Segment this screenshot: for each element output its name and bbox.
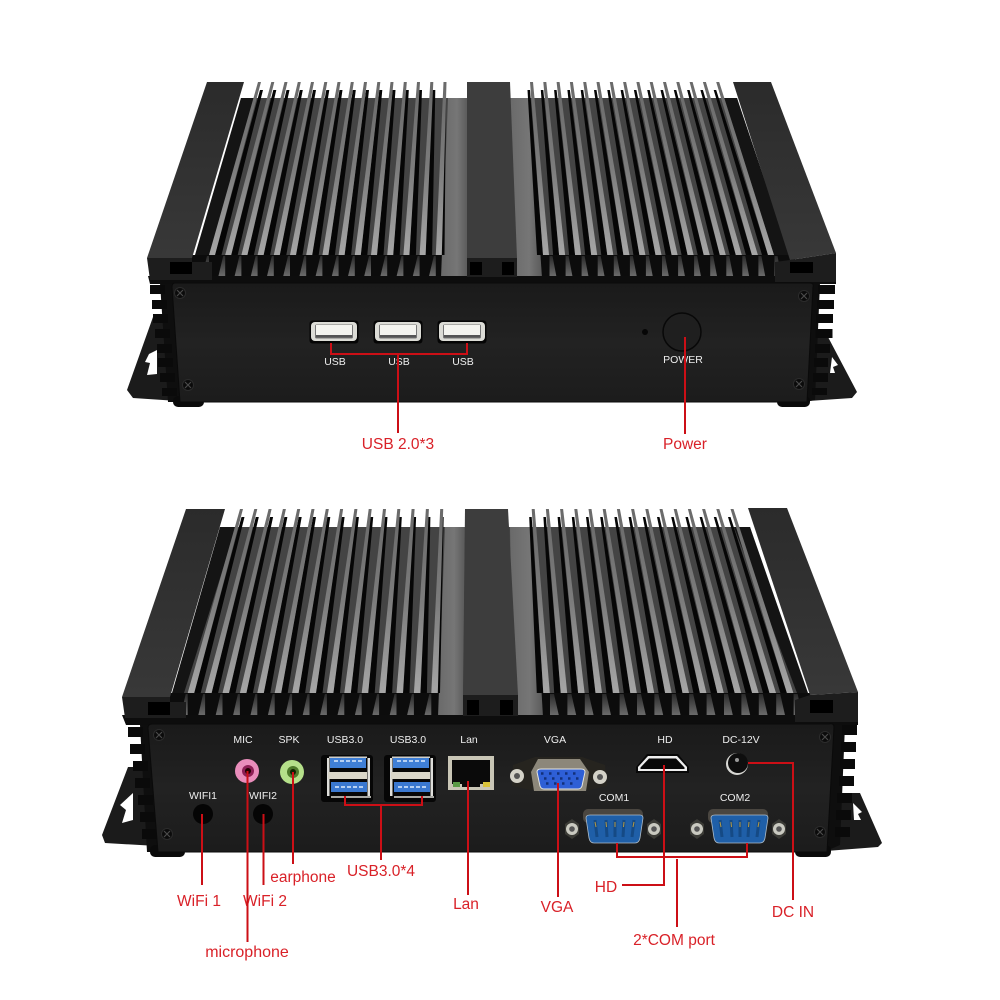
right rail xyxy=(748,508,858,722)
COM callout line xyxy=(617,843,747,927)
USB 3.0 ports xyxy=(321,755,436,802)
bottom unit: mini PC rear view xyxy=(102,508,882,857)
power LED xyxy=(642,329,648,335)
USB panel labels: USB xyxy=(324,356,346,368)
panel port labels: SPK xyxy=(278,734,300,746)
DC IN callout line xyxy=(748,763,793,900)
right fins shadows xyxy=(529,517,787,693)
centre grey channels xyxy=(438,527,543,717)
icon: speaker jack xyxy=(280,760,304,784)
USB panel labels: USB xyxy=(452,356,474,368)
USB panel labels: USB xyxy=(388,356,410,368)
WiFi 2 label: WiFi 2 xyxy=(243,893,287,910)
centre grey channels xyxy=(441,98,542,278)
heatsink base plate xyxy=(175,527,808,716)
Power label: Power xyxy=(663,436,707,453)
panel port labels: COM2 xyxy=(720,792,750,804)
panel port labels: VGA xyxy=(544,734,566,746)
shadows beside outer rails xyxy=(172,527,808,693)
WiFi 1 callout line xyxy=(201,814,203,885)
USB3.0*4 label: USB3.0*4 xyxy=(347,863,415,880)
fin front faces xyxy=(190,255,795,278)
USB 2.0 ports xyxy=(310,320,486,344)
power button xyxy=(663,313,701,351)
panel port labels: COM1 xyxy=(599,792,629,804)
right fin front wedges xyxy=(550,256,782,277)
left fins shadows xyxy=(215,90,446,255)
right fin front wedges xyxy=(550,694,803,716)
right fins shadows xyxy=(528,90,768,255)
panel port labels: HD xyxy=(657,734,673,746)
top unit: mini PC front view xyxy=(127,82,857,407)
front panel xyxy=(172,283,813,402)
right mounting bracket xyxy=(824,725,882,852)
left mounting bracket xyxy=(102,725,158,852)
right rail xyxy=(733,82,836,282)
HDMI port xyxy=(636,754,689,773)
right mounting bracket xyxy=(805,283,857,402)
panel port labels: DC-12V xyxy=(722,734,760,746)
HD label: HD xyxy=(595,879,617,896)
VGA port xyxy=(510,757,607,791)
feet xyxy=(173,396,810,407)
icon: microphone jack xyxy=(235,759,259,783)
COM ports xyxy=(565,809,786,843)
microphone label: microphone xyxy=(205,944,289,961)
VGA callout line xyxy=(557,783,559,897)
panel port labels: WIFI2 xyxy=(249,790,277,802)
HD callout line xyxy=(622,765,664,885)
left fins shadows xyxy=(194,517,444,693)
DC IN label: DC IN xyxy=(772,904,814,921)
panel port labels: WIFI1 xyxy=(189,790,217,802)
WiFi 1 label: WiFi 1 xyxy=(177,893,221,910)
panel port labels: MIC xyxy=(233,734,253,746)
heatsink lower bar xyxy=(148,276,836,284)
panel port labels: Lan xyxy=(460,734,478,746)
earphone callout line xyxy=(292,772,294,864)
microphone callout line xyxy=(246,771,248,942)
panel port labels xyxy=(189,734,760,804)
panel screws xyxy=(154,730,830,840)
heatsink base plate xyxy=(195,98,790,277)
VGA label: VGA xyxy=(541,899,574,916)
Lan label: Lan xyxy=(453,896,479,913)
left fins xyxy=(188,509,443,693)
USB 2.0 callout line xyxy=(331,343,467,433)
power callout line xyxy=(684,337,686,434)
USB 2.0*3 label: USB 2.0*3 xyxy=(362,436,434,453)
shadows beside outer rails xyxy=(195,98,790,255)
right fins xyxy=(530,82,774,255)
left rail xyxy=(147,82,244,280)
panel port labels: USB3.0 xyxy=(327,734,363,746)
LAN port xyxy=(448,756,494,790)
panel port labels: USB3.0 xyxy=(390,734,426,746)
earphone label: earphone xyxy=(270,869,336,886)
feet xyxy=(150,845,831,857)
fin front faces xyxy=(170,693,810,717)
WiFi antenna holes xyxy=(193,804,273,824)
DC power jack xyxy=(726,753,748,775)
left fin front wedges xyxy=(181,694,431,716)
USB3.0 callout line xyxy=(345,796,422,860)
left mounting bracket xyxy=(127,283,182,402)
left fin front wedges xyxy=(202,256,436,277)
left fins xyxy=(209,82,446,255)
heatsink lower bar xyxy=(122,715,858,725)
rear panel xyxy=(148,724,834,852)
centre rail xyxy=(463,509,518,716)
left rail xyxy=(122,509,225,718)
USB panel labels xyxy=(324,356,474,368)
centre rail xyxy=(467,82,517,277)
panel screws xyxy=(174,288,810,390)
right fins xyxy=(532,509,793,693)
POWER panel label: POWER xyxy=(663,354,703,366)
WiFi 2 callout line xyxy=(262,814,264,885)
2*COM port label: 2*COM port xyxy=(633,932,716,949)
Lan callout line xyxy=(467,781,469,895)
